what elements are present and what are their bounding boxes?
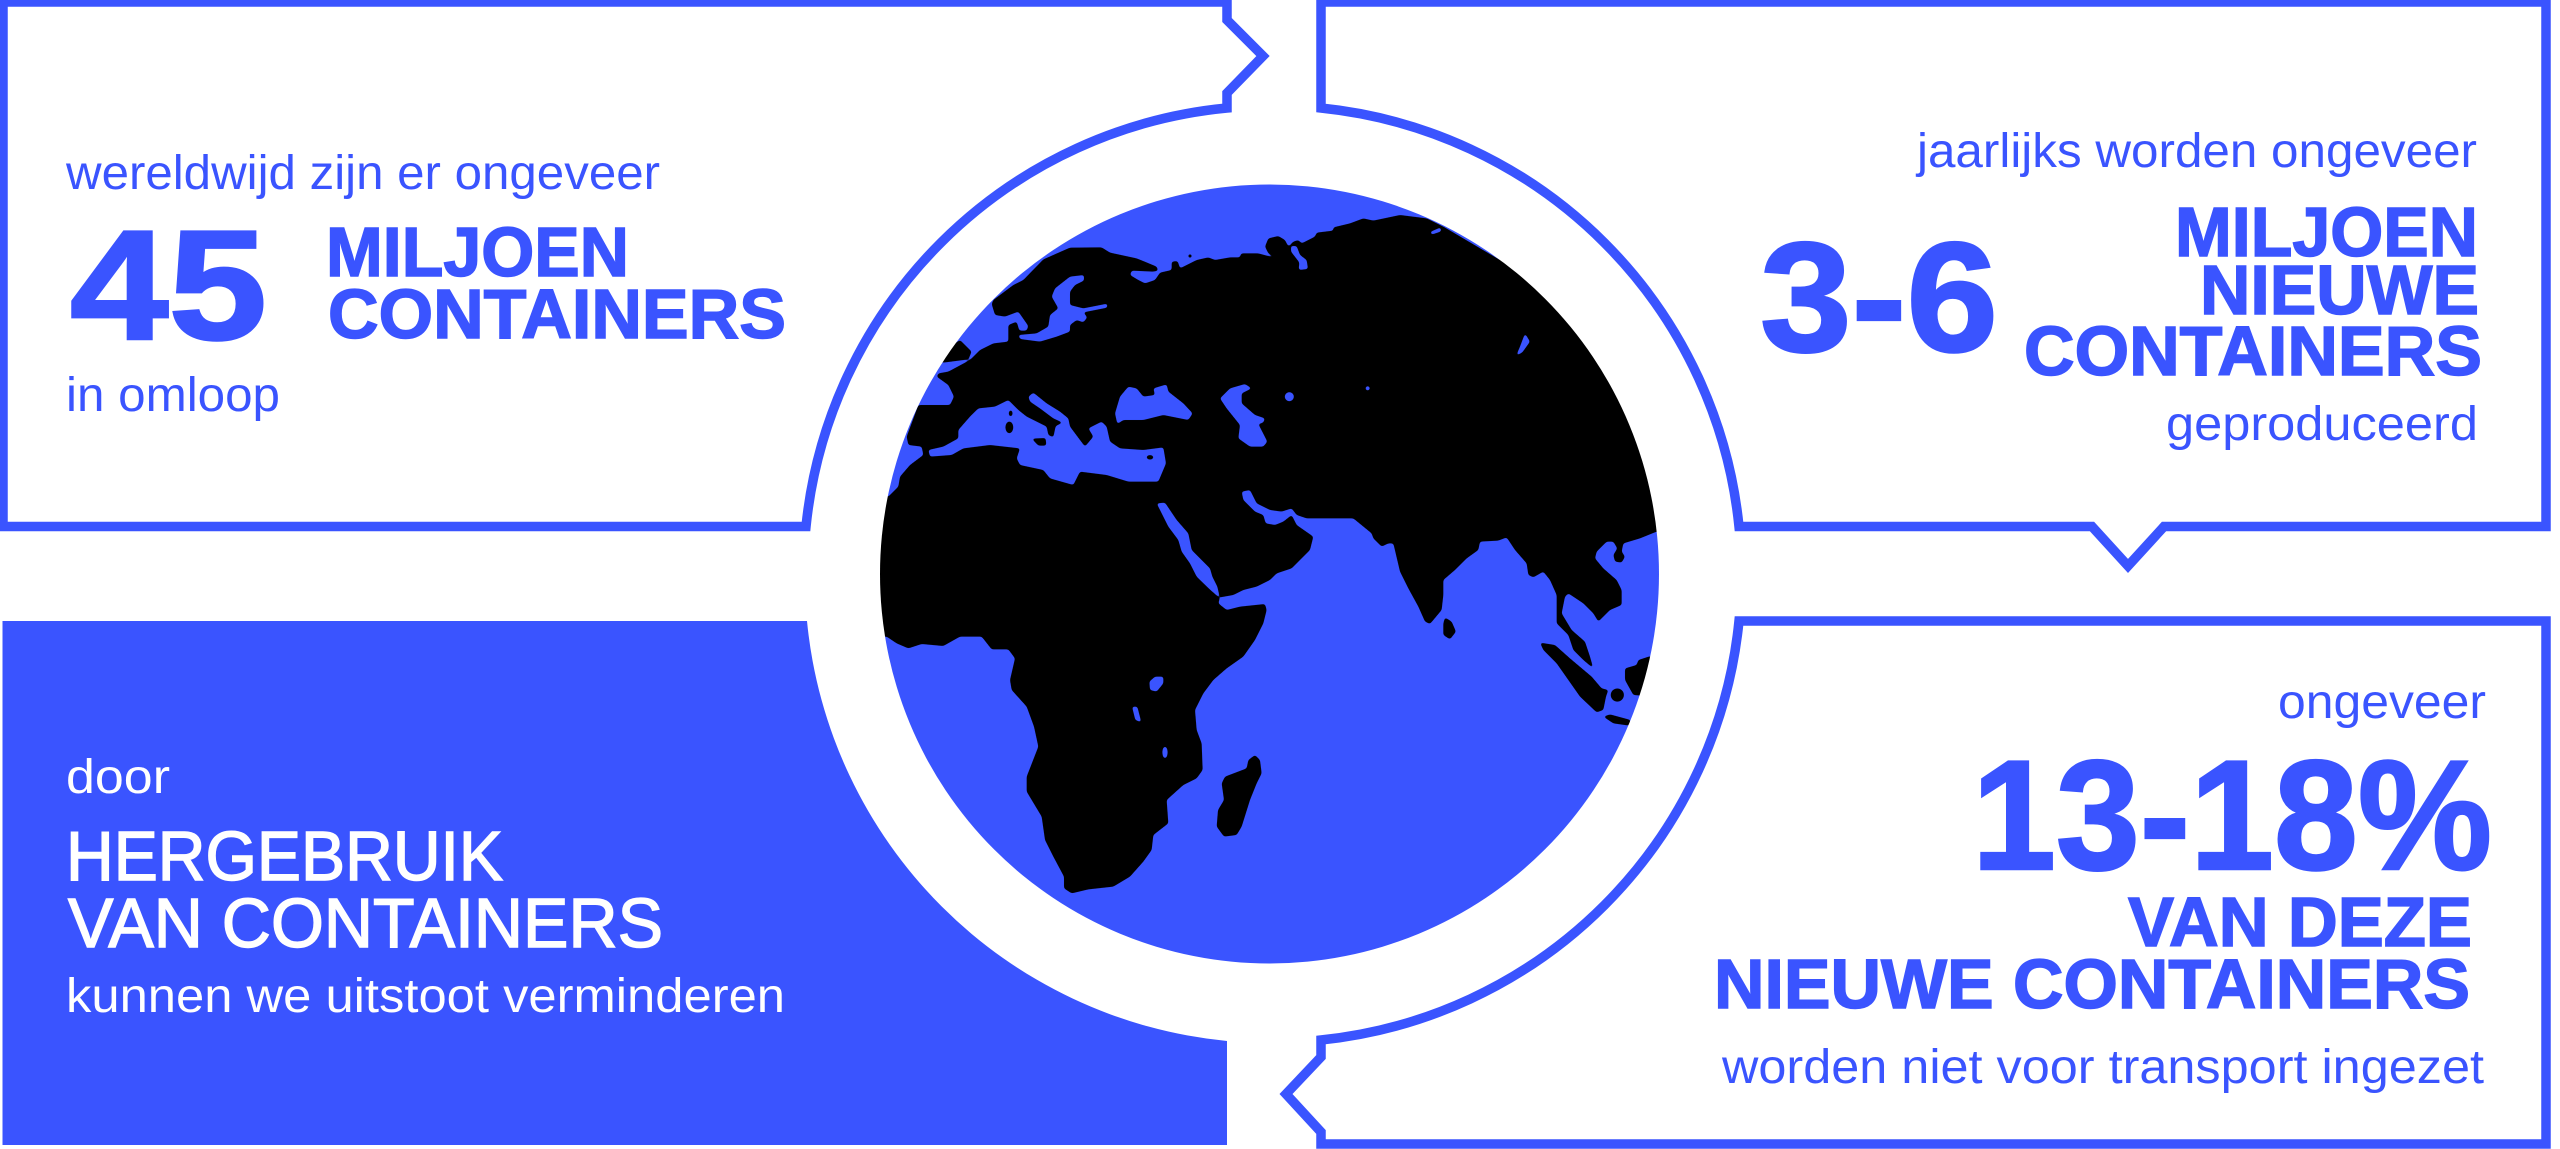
land: eurasia and africa bbox=[880, 215, 1657, 894]
heading: hergebruik van containers bbox=[66, 817, 663, 962]
sea: mediterranean bbox=[928, 393, 1166, 485]
islands: corsica, sardinia, sicily, crete bbox=[1005, 254, 1192, 460]
number: 3-6: 3-6 bbox=[1760, 211, 1998, 385]
land: indonesia bbox=[1540, 643, 1660, 726]
heading: van deze nieuwe containers: VAN DEZE bbox=[2128, 883, 2472, 961]
heading: van deze nieuwe containers bbox=[1714, 883, 2472, 1023]
panel: hergebruik van containers bbox=[2, 621, 1227, 1145]
heading: miljoen nieuwe containers: MILJOEN bbox=[2175, 193, 2478, 271]
heading: miljoen nieuwe containers: CONTAINERS bbox=[2024, 312, 2482, 390]
lakes and inlets bbox=[1132, 227, 1530, 758]
sea: red sea bbox=[1157, 503, 1220, 598]
text: intro top right: jaarlijks worden ongeveer bbox=[1915, 125, 2477, 178]
heading: miljoen containers bbox=[326, 213, 786, 353]
heading: van deze nieuwe containers: NIEUWE CONTAINERS bbox=[1714, 945, 2470, 1023]
text: in omloop: in omloop bbox=[66, 369, 280, 422]
sea: caspian bbox=[1220, 384, 1267, 447]
panel: 45 miljoen containers bbox=[3, 2, 1263, 526]
text: door: door bbox=[66, 751, 170, 804]
text: intro top left: wereldwijd zijn er ongeveer bbox=[65, 147, 660, 200]
panel: 13-18% van deze nieuwe containers bbox=[1286, 621, 2546, 1144]
heading: hergebruik van containers: VAN CONTAINERS bbox=[68, 884, 663, 962]
sea: baltic bbox=[1018, 275, 1107, 342]
land: madagascar bbox=[1217, 755, 1262, 837]
heading: miljoen containers: MILJOEN bbox=[326, 213, 629, 291]
globe bbox=[880, 184, 1659, 964]
land: sri lanka bbox=[1443, 617, 1456, 639]
text: worden niet voor transport ingezet: worden niet voor transport ingezet bbox=[1721, 1041, 2484, 1094]
text: kunnen we uitstoot verminderen: kunnen we uitstoot verminderen bbox=[66, 970, 785, 1023]
panel: 3-6 miljoen nieuwe containers bbox=[1321, 2, 2546, 566]
sea: black sea bbox=[1115, 384, 1193, 424]
heading: miljoen containers: CONTAINERS bbox=[328, 275, 786, 353]
text: ongeveer: ongeveer bbox=[2278, 676, 2486, 729]
number: 13-18%: 13-18% bbox=[1972, 729, 2492, 903]
heading: miljoen nieuwe containers: NIEUWE bbox=[2200, 251, 2479, 329]
land: britain bbox=[942, 340, 972, 362]
text: geproduceerd: geproduceerd bbox=[2166, 398, 2478, 451]
heading: hergebruik van containers: HERGEBRUIK bbox=[66, 817, 503, 895]
number: 45: 45 bbox=[70, 199, 267, 373]
heading: miljoen nieuwe containers bbox=[2024, 193, 2482, 390]
